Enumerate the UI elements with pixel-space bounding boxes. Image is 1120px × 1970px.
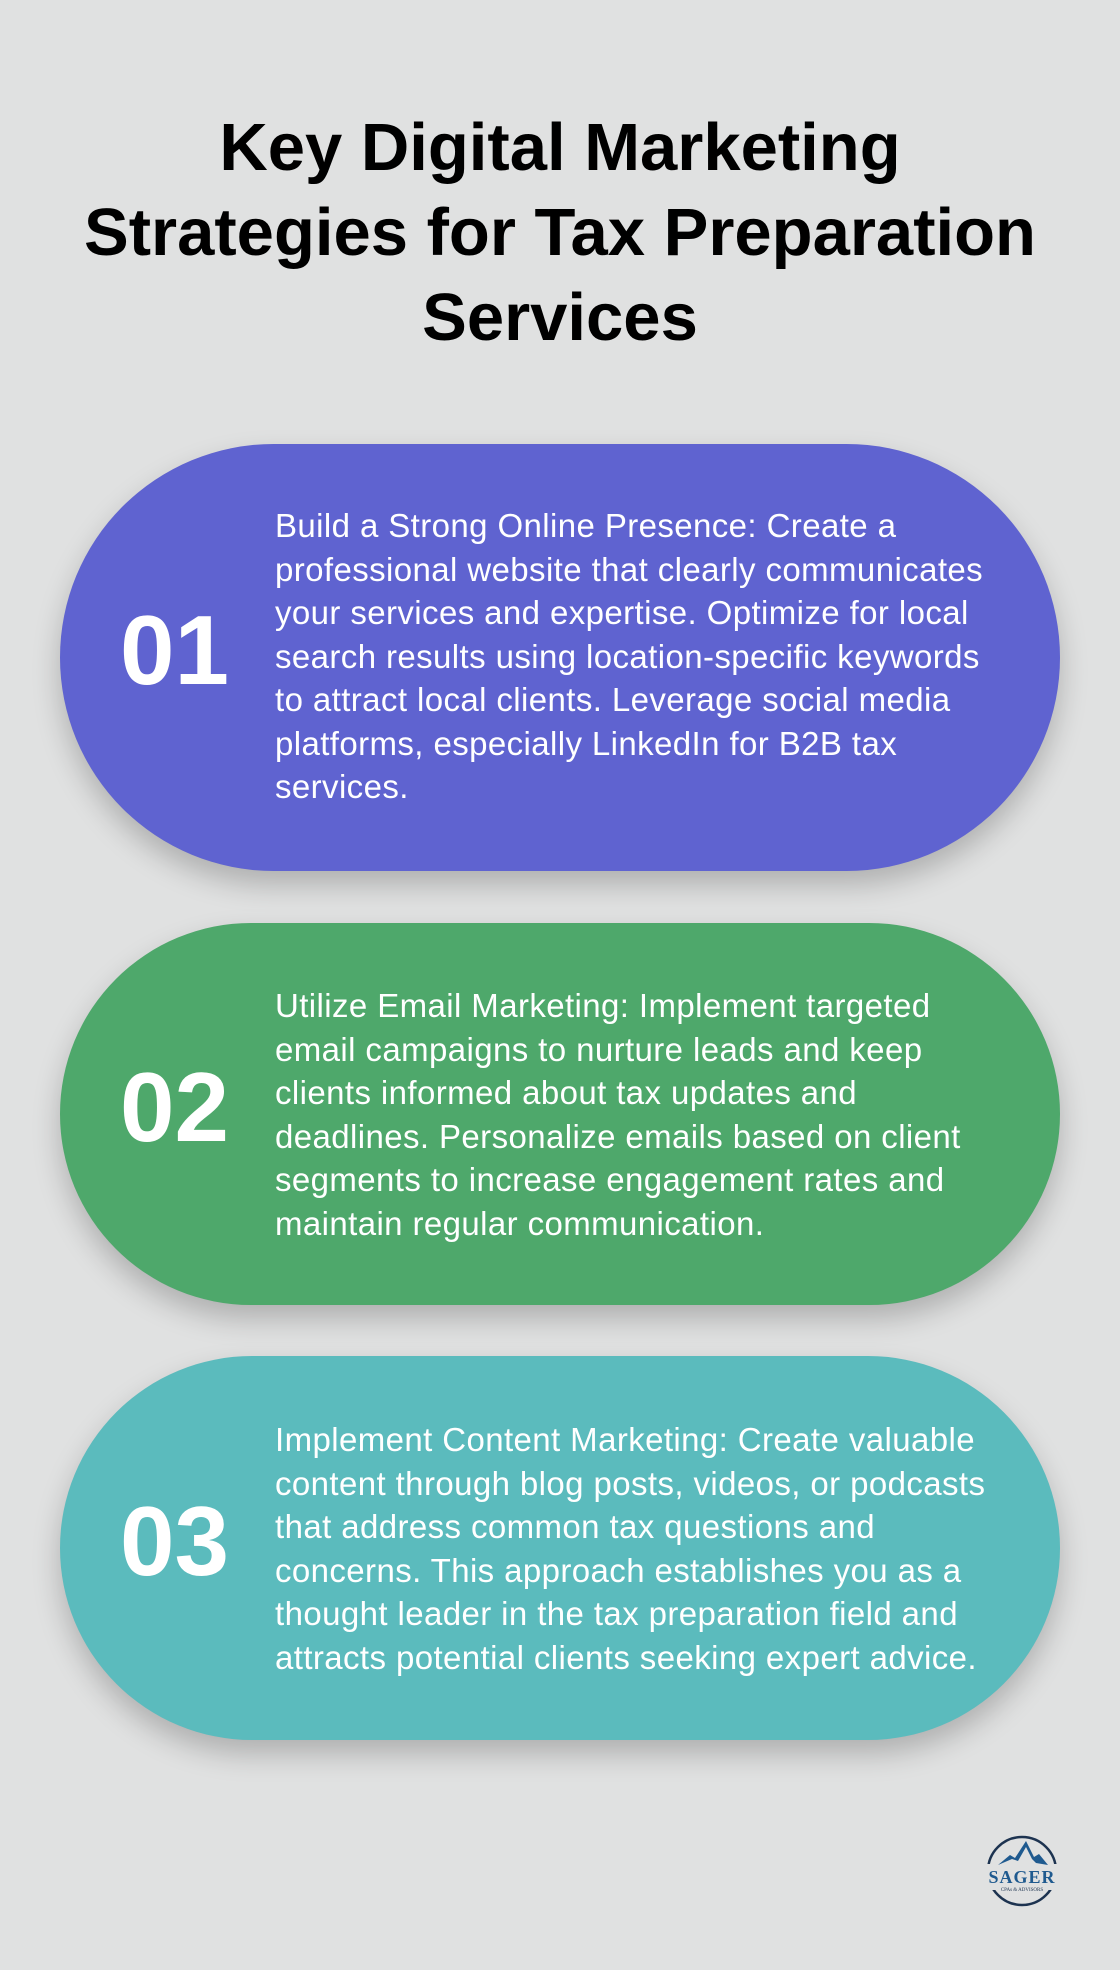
text 03: Implement Content Marketing: Create valuable <box>275 1421 975 1458</box>
text 01: your services and expertise. Optimize for local <box>275 594 969 631</box>
text 02: deadlines. Personalize emails based on client <box>275 1118 961 1154</box>
text 01: search results using location-specific keywords <box>275 638 980 674</box>
title: Strategies for Tax Preparation <box>84 195 1036 270</box>
title: Services <box>422 280 698 355</box>
panel: 02 <box>60 923 1060 1305</box>
text 02: maintain regular communication. <box>275 1204 764 1242</box>
title <box>84 110 1036 355</box>
panel: 01 <box>60 444 1060 871</box>
text 01: professional website that clearly communicates <box>275 550 983 588</box>
text 03: that address common tax questions and <box>275 1508 875 1545</box>
title: Key Digital Marketing <box>219 110 901 185</box>
number 02: 02 <box>120 1052 229 1162</box>
text 03: concerns. This approach establishes you as a <box>275 1552 962 1588</box>
panel: 03 <box>60 1356 1060 1740</box>
text 02: segments to increase engagement rates and <box>275 1161 944 1198</box>
logo: Sager: SAGER <box>988 1867 1056 1887</box>
number 03: 03 <box>120 1486 229 1596</box>
text 02 <box>275 987 961 1242</box>
text 01: platforms, especially LinkedIn for B2B tax <box>275 724 897 762</box>
text 01: to attract local clients. Leverage social media <box>275 681 950 718</box>
text 01 <box>275 507 983 805</box>
text 03 <box>275 1421 985 1676</box>
text 03: thought leader in the tax preparation field and <box>275 1595 958 1632</box>
text 03: attracts potential clients seeking expert advice. <box>275 1638 977 1676</box>
text 03: content through blog posts, videos, or podcasts <box>275 1464 985 1502</box>
text 02: clients informed about tax updates and <box>275 1074 857 1111</box>
text 01: services. <box>275 768 409 805</box>
number 01: 01 <box>120 595 229 705</box>
text 02: Utilize Email Marketing: Implement targeted <box>275 987 930 1024</box>
text 02: email campaigns to nurture leads and keep <box>275 1030 922 1068</box>
logo: Sager <box>987 1836 1057 1906</box>
text 01: Build a Strong Online Presence: Create a <box>275 507 896 544</box>
logo: Sager: CPAs & ADVISORS <box>1001 1888 1043 1893</box>
